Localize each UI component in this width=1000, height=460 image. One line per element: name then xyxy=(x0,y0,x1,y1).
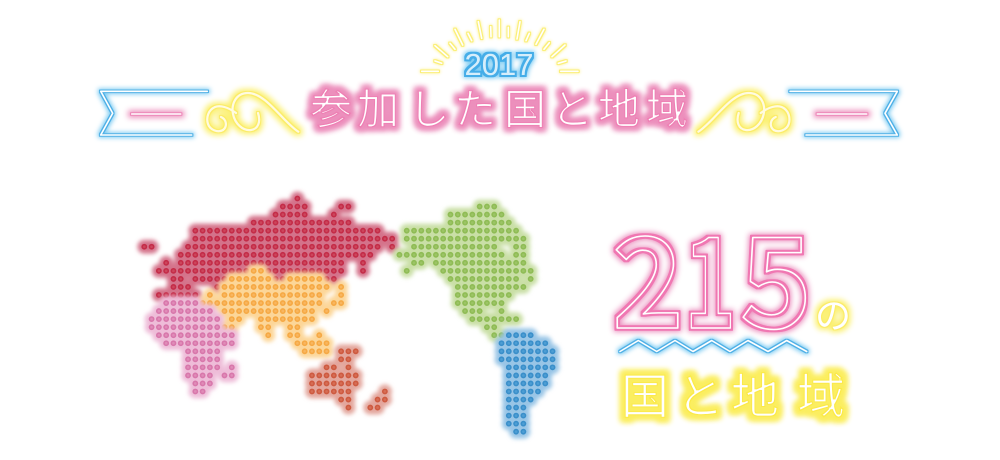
hiragana no: の xyxy=(815,295,851,336)
year heading: 2017 xyxy=(465,47,533,82)
region: north america (green) xyxy=(399,207,531,335)
region: russia and europe north (red) xyxy=(144,198,392,295)
zigzag wave xyxy=(620,340,807,352)
caption: countries and regions: 国と地域 xyxy=(621,371,845,424)
title: 参加した国と地域 xyxy=(310,86,688,133)
right ribbon xyxy=(790,91,897,135)
dot world map xyxy=(144,198,553,432)
big number 215: 5 xyxy=(740,187,812,364)
decorative sun rays xyxy=(422,20,578,71)
big number 215: 2 xyxy=(612,187,684,364)
region: south america (blue) xyxy=(502,335,553,432)
big number 215 xyxy=(612,187,812,364)
left ribbon xyxy=(101,91,207,135)
region: oceania (tomato) xyxy=(312,351,385,408)
right scroll ornament xyxy=(698,93,789,132)
region: africa and middle east (pink) xyxy=(152,303,232,391)
region: asia (orange) xyxy=(203,271,341,351)
big number 215: 1 xyxy=(684,187,736,364)
left scroll ornament xyxy=(207,93,298,132)
